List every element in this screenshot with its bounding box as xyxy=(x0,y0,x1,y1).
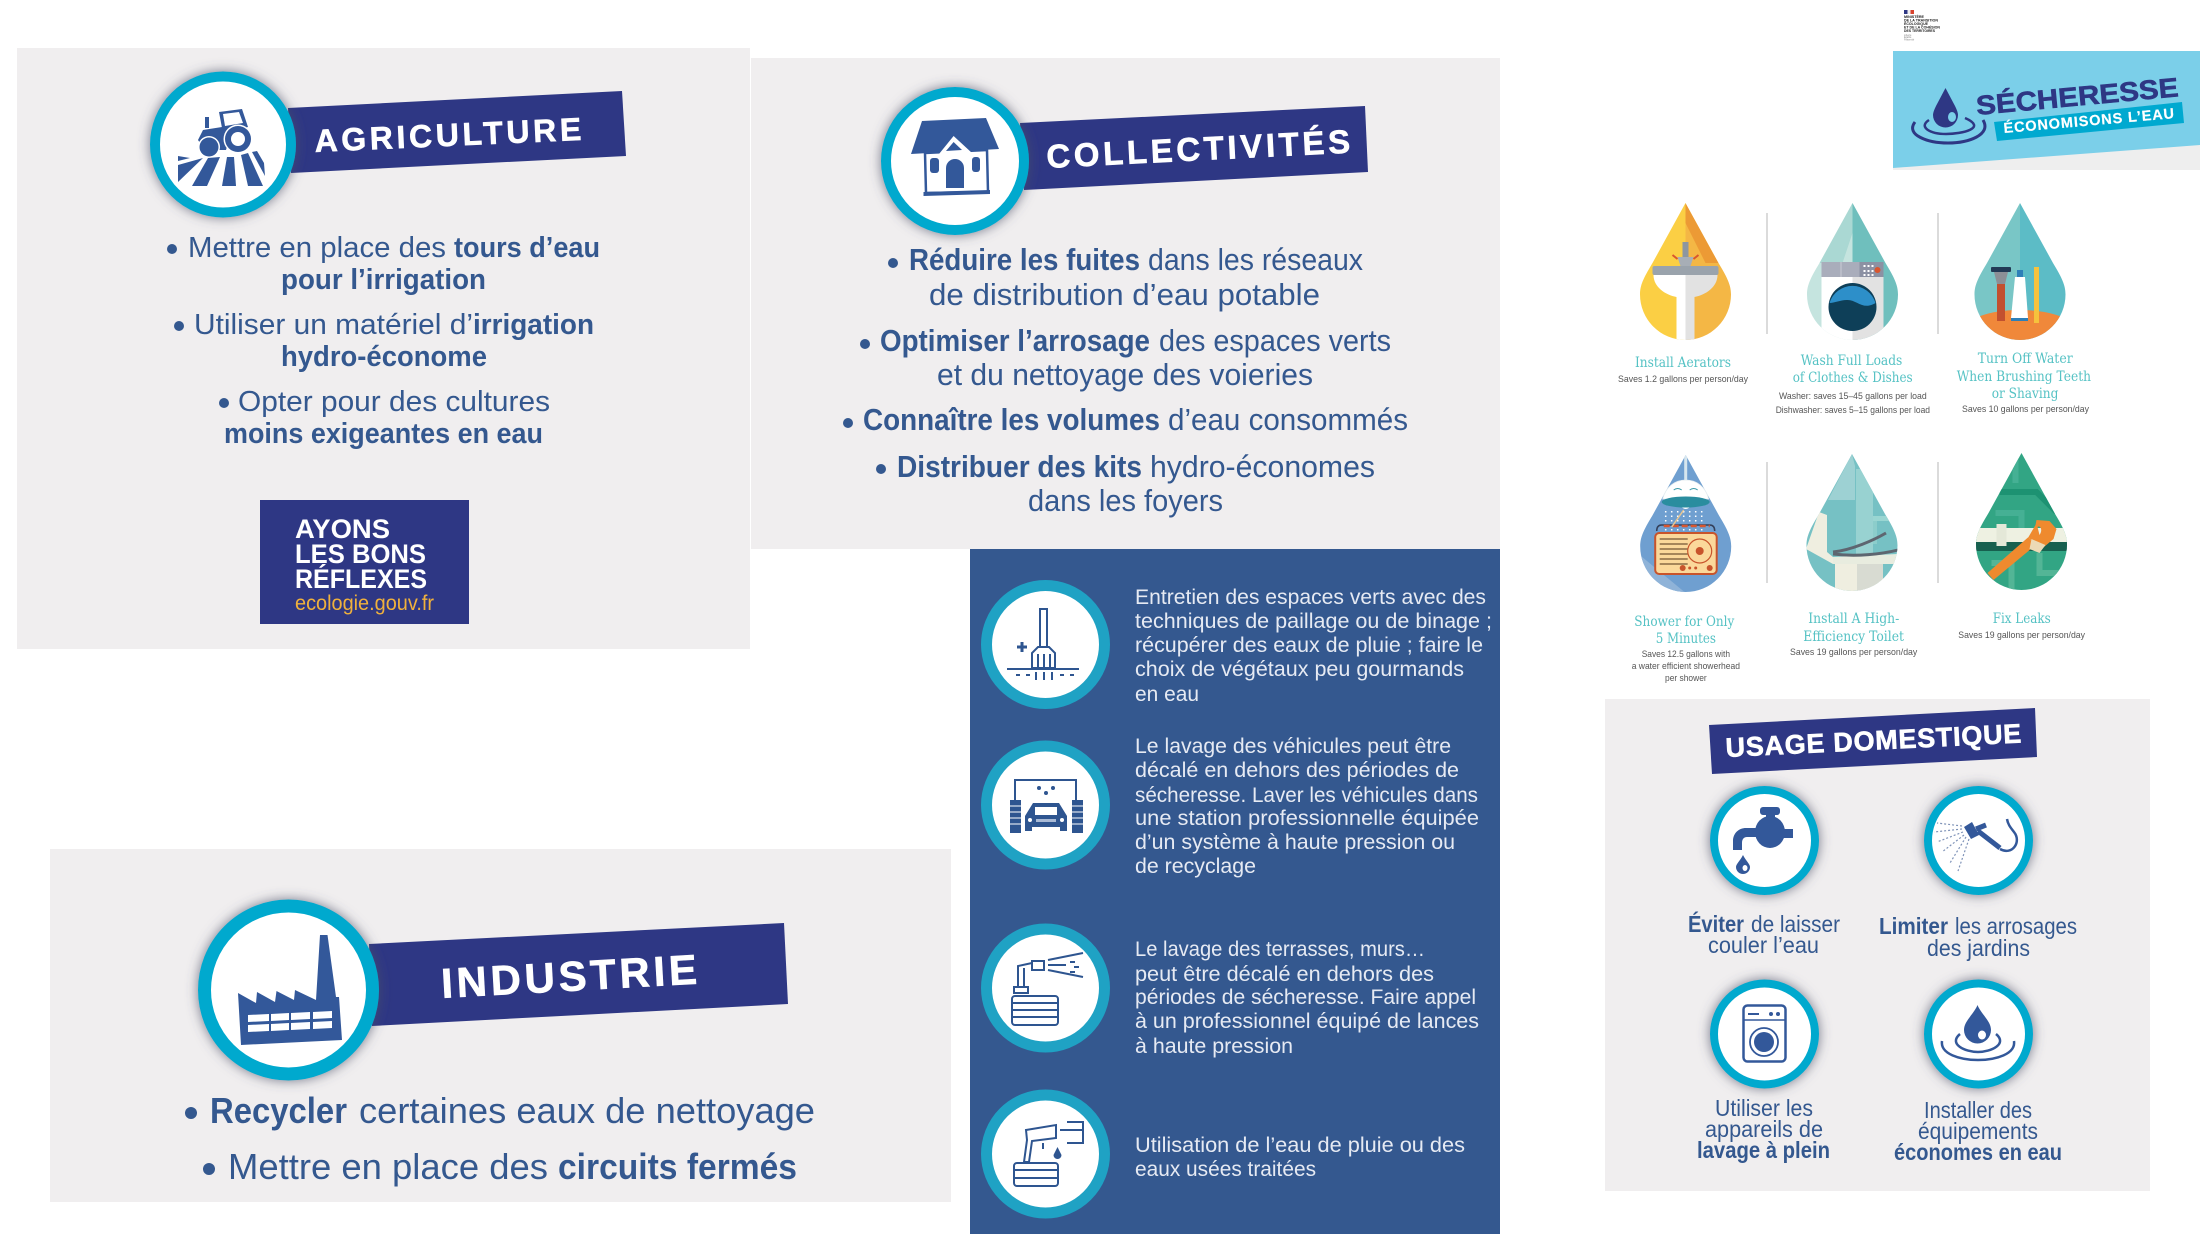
text: washing machine: appareils de xyxy=(1705,1116,1823,1142)
text: high efficiency toilet: Efficiency Toilet xyxy=(1803,629,1904,645)
text block: agriculture actions: tours d’eau xyxy=(454,232,600,264)
text block: collectivités actions: Distribuer des kits xyxy=(897,449,1142,484)
card: wash full loads xyxy=(1776,203,1930,416)
text block: collectivités actions: Optimiser l’arrosage xyxy=(880,323,1150,358)
text block: collectivités actions: Réduire les fuites xyxy=(909,242,1140,277)
text block: industrie actions: Recycler xyxy=(210,1090,347,1131)
banner: sécheresse économisons l'eau xyxy=(1893,51,2200,170)
badge: ayons les bons réflexes: RÉFLEXES xyxy=(295,563,427,594)
text block: industrie actions: Mettre en place des xyxy=(228,1146,548,1187)
icon: shower and radio drop xyxy=(1640,455,1732,593)
card: high efficiency toilet xyxy=(1790,454,1918,658)
text block: collectivités actions: et du nettoyage des voieries xyxy=(937,357,1313,392)
badge: ayons les bons réflexes: AYONS xyxy=(295,514,390,544)
text: wash full loads: Washer: saves 15–45 gallons per load xyxy=(1779,391,1927,402)
text: rainwater use xyxy=(1135,1134,1465,1181)
text: wash full loads xyxy=(1776,353,1930,416)
card: install aerators xyxy=(1618,203,1748,385)
text: terrace washing: à haute pression xyxy=(1135,1035,1293,1058)
icon: spray hose xyxy=(1928,790,2029,891)
badge: ayons les bons réflexes xyxy=(260,500,469,624)
text: terrace washing: à un professionnel équipé de lances xyxy=(1135,1010,1479,1033)
ribbon: collectivités heading xyxy=(1020,106,1368,190)
text: shower: per shower xyxy=(1665,673,1707,684)
icon: pressure washer xyxy=(986,929,1104,1047)
text block: collectivités actions: hydro-économes xyxy=(1150,449,1375,484)
text: fix leaks: Fix Leaks xyxy=(1993,611,2051,627)
text block: agriculture actions: Utiliser un matériel d’ xyxy=(194,309,473,341)
text block: agriculture actions: Opter pour des cultures xyxy=(238,386,550,418)
text: tap: Éviter xyxy=(1688,910,1744,937)
text: green space maintenance xyxy=(1135,586,1492,706)
item: tap xyxy=(1688,790,1840,958)
logo: ministère: ET DE LA COHÉSION xyxy=(1904,24,1940,30)
icon: dripping tap xyxy=(1714,790,1815,891)
ribbon: agriculture heading: AGRICULTURE xyxy=(314,111,582,159)
text block: agriculture actions: irrigation xyxy=(473,309,594,341)
text block: collectivités actions: Connaître les volumes xyxy=(863,402,1160,437)
item: rainwater use xyxy=(986,1095,1465,1213)
icon: washing machine drop xyxy=(1806,203,1898,341)
text block: collectivités actions: des espaces verts xyxy=(1159,323,1391,358)
icon: rainwater hose xyxy=(986,1095,1104,1213)
text: shower xyxy=(1632,614,1740,684)
item: washing machine xyxy=(1697,984,1830,1163)
badge: ayons les bons réflexes: ecologie.gouv.fr xyxy=(295,592,434,615)
text block: collectivités actions: d’eau consommés xyxy=(1168,402,1408,437)
badge: ayons les bons réflexes: LES BONS xyxy=(295,539,426,569)
text: green space maintenance: Entretien des espaces verts avec des xyxy=(1135,586,1486,609)
ribbon: usage domestique heading xyxy=(1709,708,2037,774)
text: garden hose xyxy=(1879,913,2077,961)
item: green space maintenance xyxy=(986,586,1492,706)
card: turn off water xyxy=(1957,203,2091,415)
text: vehicle washing: décalé en dehors des périodes de xyxy=(1135,759,1459,782)
text: green space maintenance: choix de végétaux peu gourmands xyxy=(1135,658,1464,681)
icon: banner water drop xyxy=(1913,88,1985,143)
text block: industrie actions: circuits fermés xyxy=(558,1146,797,1187)
text: fix leaks xyxy=(1958,611,2085,641)
text: vehicle washing xyxy=(1135,735,1479,878)
text: terrace washing: peut être décalé en dehors des xyxy=(1135,963,1434,986)
text: turn off water: Saves 10 gallons per person/day xyxy=(1962,404,2089,415)
logo: ministère: DES TERRITOIRES xyxy=(1904,29,1936,33)
item: terrace washing xyxy=(986,929,1479,1058)
text: garden hose: Limiter xyxy=(1879,913,1948,939)
text: high efficiency toilet xyxy=(1790,611,1918,658)
icon: car wash xyxy=(986,746,1104,864)
icon: sink drop xyxy=(1640,203,1732,341)
ribbon: collectivités heading: COLLECTIVITÉS xyxy=(1045,123,1351,175)
panel: agriculture xyxy=(17,48,750,649)
text: tap xyxy=(1688,910,1840,958)
text: vehicle washing: de recyclage xyxy=(1135,855,1256,878)
icon: tractor in circle xyxy=(155,76,291,212)
text: turn off water: or Shaving xyxy=(1992,386,2058,402)
logo: ministère: DE LA TRANSITION xyxy=(1904,18,1938,22)
text: wash full loads: of Clothes & Dishes xyxy=(1793,370,1913,386)
text: vehicle washing: Le lavage des véhicules peut être xyxy=(1135,735,1451,758)
panel: blue outdoor water uses xyxy=(970,549,1500,1234)
text: terrace washing: Le lavage des terrasses, murs… xyxy=(1135,938,1425,961)
text: water saving equipment: Installer des xyxy=(1924,1097,2032,1123)
icon: toilet drop xyxy=(1806,454,1899,592)
icon: broom xyxy=(986,586,1104,704)
text block: agriculture actions: pour l’irrigation xyxy=(281,264,486,296)
text: install aerators: Install Aerators xyxy=(1635,355,1731,371)
text block: collectivités actions: de distribution d’eau potable xyxy=(929,277,1320,312)
logo: ministère: Fraternité xyxy=(1904,38,1915,41)
text: garden hose: les arrosages xyxy=(1955,913,2077,939)
text block: industrie actions xyxy=(185,1090,815,1187)
panel: usage domestique xyxy=(1605,699,2150,1191)
text: tap: de laisser xyxy=(1751,911,1840,937)
logo: ministère: MINISTÈRE xyxy=(1904,14,1925,19)
icon: washing machine xyxy=(1714,984,1815,1084)
icon: wrench drop xyxy=(1976,453,2068,591)
text: shower: 5 Minutes xyxy=(1656,631,1716,647)
card: shower xyxy=(1632,455,1740,684)
card: fix leaks xyxy=(1958,453,2085,641)
ribbon: économisons l'eau: ÉCONOMISONS L’EAU xyxy=(2003,105,2175,137)
text: turn off water xyxy=(1957,351,2091,415)
icon: factory in circle xyxy=(204,906,372,1074)
text: terrace washing xyxy=(1135,938,1479,1058)
logo: ministère: Liberté xyxy=(1904,34,1912,37)
text: terrace washing: périodes de sécheresse. Faire appel xyxy=(1135,986,1476,1009)
text block: industrie actions: certaines eaux de nettoyage xyxy=(359,1090,815,1131)
text: green space maintenance: récupérer des eaux de pluie ; faire le xyxy=(1135,634,1483,657)
text: install aerators xyxy=(1618,355,1748,385)
text: install aerators: Saves 1.2 gallons per person/day xyxy=(1618,374,1748,385)
logo: ministère xyxy=(1904,10,1940,41)
text: green space maintenance: techniques de paillage ou de binage ; xyxy=(1135,610,1492,633)
text block: agriculture actions: moins exigeantes en eau xyxy=(224,418,543,450)
text: wash full loads: Dishwasher: saves 5–15 gallons per load xyxy=(1776,405,1930,416)
ribbon: industrie heading xyxy=(369,923,788,1026)
text: turn off water: Turn Off Water xyxy=(1978,351,2073,367)
divider lines xyxy=(1767,213,1938,583)
text: rainwater use: eaux usées traitées xyxy=(1135,1158,1316,1181)
ribbon: industrie heading: INDUSTRIE xyxy=(440,946,698,1007)
text block: collectivités actions: dans les foyers xyxy=(1028,483,1223,518)
text: washing machine: lavage à plein xyxy=(1697,1137,1830,1163)
text: wash full loads: Wash Full Loads xyxy=(1801,353,1902,369)
item: vehicle washing xyxy=(986,735,1479,878)
text: tap: couler l’eau xyxy=(1708,932,1819,958)
text block: collectivités actions xyxy=(843,242,1408,518)
text: green space maintenance: en eau xyxy=(1135,683,1199,706)
text: vehicle washing: d’un système à haute pression ou xyxy=(1135,831,1455,854)
text: water saving equipment xyxy=(1894,1097,2062,1165)
text: water saving equipment: équipements xyxy=(1918,1118,2038,1144)
text: fix leaks: Saves 19 gallons per person/day xyxy=(1958,630,2085,641)
text: garden hose: des jardins xyxy=(1927,935,2030,961)
text: rainwater use: Utilisation de l’eau de pluie ou des xyxy=(1135,1134,1465,1157)
logo: ministère: ÉCOLOGIQUE xyxy=(1904,21,1929,26)
heading: sécheresse: SÉCHERESSE xyxy=(1975,71,2180,121)
text: shower: a water efficient showerhead xyxy=(1632,661,1740,672)
logo: ministère: Égalité xyxy=(1904,36,1912,39)
panel: industrie xyxy=(50,849,951,1202)
text: high efficiency toilet: Install A High- xyxy=(1808,611,1900,627)
text: vehicle washing: une station professionnelle équipée xyxy=(1135,807,1479,830)
text: shower: Shower for Only xyxy=(1634,614,1734,630)
icon: drop with ripples xyxy=(1928,984,2029,1084)
item: garden hose xyxy=(1879,790,2077,961)
item: water saving equipment xyxy=(1894,984,2062,1165)
ribbon: agriculture heading xyxy=(288,91,626,173)
text: turn off water: When Brushing Teeth xyxy=(1957,369,2091,385)
text block: agriculture actions xyxy=(167,232,600,450)
text: washing machine xyxy=(1697,1095,1830,1163)
text: washing machine: Utiliser les xyxy=(1715,1095,1813,1121)
text: water saving equipment: économes en eau xyxy=(1894,1139,2062,1165)
ribbon: usage domestique heading: USAGE DOMESTIQUE xyxy=(1725,719,2022,763)
text: shower: Saves 12.5 gallons with xyxy=(1642,649,1730,660)
text block: collectivités actions: dans les réseaux xyxy=(1148,242,1363,277)
icon: house in circle xyxy=(886,92,1024,230)
text block: agriculture actions: hydro-économe xyxy=(281,341,487,373)
text block: agriculture actions: Mettre en place des xyxy=(188,232,446,264)
text: vehicle washing: sécheresse. Laver les véhicules dans xyxy=(1135,784,1478,807)
icon: razor and toothpaste drop xyxy=(1974,203,2066,341)
text: high efficiency toilet: Saves 19 gallons per person/day xyxy=(1790,647,1918,658)
panel: collectivités xyxy=(751,58,1500,549)
